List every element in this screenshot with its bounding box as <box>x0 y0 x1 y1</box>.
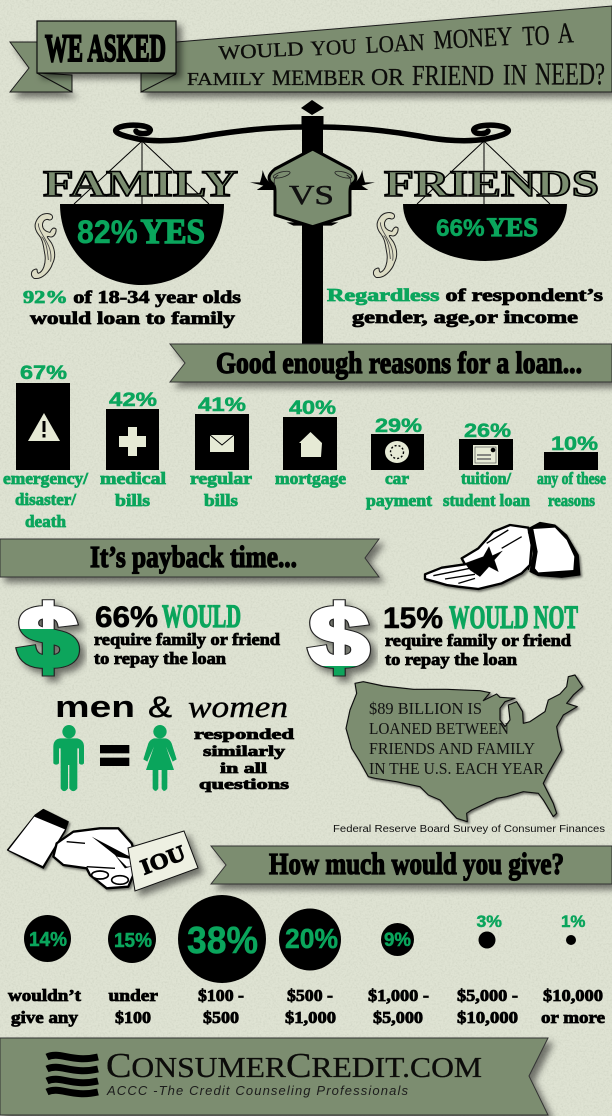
us map callout: IN THE U.S. EACH YEAR <box>369 759 545 778</box>
bubble: 14 percent <box>8 915 81 1027</box>
bar: any of these reasons: reasons <box>548 491 595 510</box>
bubble: 3 percent: 3% <box>476 912 502 931</box>
brand name: CONSUMER CREDIT.COM <box>106 1046 482 1085</box>
bar: any of these reasons <box>537 434 606 510</box>
question headline: A <box>557 17 574 50</box>
bar: emergency: emergency/ <box>3 469 88 488</box>
friends note <box>327 285 603 327</box>
icon: equals <box>100 745 129 766</box>
similar responses note: in all <box>220 761 267 777</box>
icon: certificate <box>473 445 498 465</box>
bubble: 9 percent: $1,000 - <box>368 986 429 1005</box>
us map callout: $89 BILLION IS <box>369 699 482 718</box>
bubble: 20 percent: $500 - <box>287 986 333 1005</box>
similar responses note: questions <box>199 777 289 793</box>
bar: mortgage <box>275 398 346 488</box>
bar: emergency: 67% <box>20 363 67 384</box>
bubble: 15 percent <box>108 915 159 1027</box>
icon: woman <box>143 725 177 791</box>
icon: dollar 15 percent filled: $ <box>309 589 369 686</box>
friends heading: FRIENDS <box>384 164 599 205</box>
bubble: 3 percent <box>457 912 518 1027</box>
bubble: 15 percent: under <box>108 986 159 1005</box>
bar: regular bills: 41% <box>198 395 246 416</box>
icon: dollar 66 percent filled: $ <box>18 589 78 686</box>
banner: payback time: It’s payback time... <box>90 539 297 574</box>
question headline: MONEY <box>433 21 513 55</box>
bubble: 14 percent: give any <box>11 1008 79 1027</box>
friends note: gender, age,or income <box>352 307 578 327</box>
question headline: FAMILY <box>187 69 265 89</box>
bubble: 9 percent: $5,000 <box>373 1008 423 1027</box>
would not repay block: require family or friend <box>385 631 571 650</box>
bubble: 1 percent: $10,000 <box>543 986 603 1005</box>
us map callout <box>346 675 583 822</box>
bubble: 15 percent: $100 <box>115 1008 151 1027</box>
would repay block <box>18 589 280 686</box>
bar: tuition <box>443 421 531 510</box>
question headline: OR <box>371 65 404 91</box>
would not repay block <box>309 589 578 686</box>
icon: house <box>299 432 322 457</box>
men and women comparison: & <box>148 691 172 724</box>
bar: car payment: 29% <box>375 416 422 437</box>
family heading: FAMILY <box>43 164 238 205</box>
bar: regular bills: bills <box>204 491 238 510</box>
bar: any of these reasons: 10% <box>551 434 598 455</box>
would repay block: WOULD <box>162 599 241 635</box>
bubble: 1 percent: or more <box>541 1008 606 1027</box>
bubble chart: amounts <box>8 895 606 1027</box>
similar responses note: similarly <box>203 744 286 760</box>
icon: wheel <box>385 441 409 463</box>
icon: warning triangle <box>28 413 60 441</box>
would repay block: 66% <box>95 601 158 634</box>
82% yes: 82%YES <box>77 212 205 251</box>
bar: tuition: 26% <box>464 421 511 442</box>
right pan: friends <box>403 204 567 261</box>
banner: payback time <box>0 539 379 577</box>
bar: mortgage: mortgage <box>275 469 346 488</box>
would repay block: to repay the loan <box>94 649 226 668</box>
bubble: 3 percent: $10,000 <box>457 1008 518 1027</box>
bar: medical bills <box>100 390 166 510</box>
question headline: LOAN <box>365 30 425 59</box>
family note: would loan to family <box>30 308 235 328</box>
left flourish <box>31 214 56 279</box>
similar responses note <box>194 727 295 793</box>
bubble: 38 percent: $500 <box>203 1008 239 1027</box>
question headline: YOU <box>310 34 357 60</box>
would not repay block: to repay the loan <box>385 650 517 669</box>
question headline: MEMBER <box>272 65 365 90</box>
friends note: Regardless of respondent’s <box>327 285 603 305</box>
men and women comparison: women <box>188 689 288 724</box>
would not repay block: 15% <box>383 602 443 635</box>
top ribbon: we asked: WE ASKED <box>45 27 166 70</box>
question headline: IN <box>503 58 527 92</box>
iou card <box>128 831 198 891</box>
similar responses note: responded <box>194 727 295 743</box>
bar: car payment: car <box>385 469 409 488</box>
bar: medical bills: bills <box>115 491 150 510</box>
bar: emergency <box>3 363 88 531</box>
bar: medical bills: 42% <box>109 390 157 411</box>
vs emblem: VS <box>289 180 334 210</box>
source note: Federal Reserve Board Survey of Consumer Finances <box>333 824 605 835</box>
family note: 92% of 18-34 year olds <box>23 287 241 307</box>
bar: emergency: disaster/ <box>15 490 76 509</box>
bubble: 3 percent: $5,000 - <box>457 986 518 1005</box>
bar chart: reasons <box>3 363 606 531</box>
bubble: 20 percent <box>279 908 341 1027</box>
bar: car payment: payment <box>366 491 432 510</box>
bubble: 15 percent: 15% <box>114 930 152 952</box>
right flourish <box>373 213 398 278</box>
top ribbon: we asked <box>10 6 612 92</box>
bubble: 14 percent: 14% <box>29 929 67 951</box>
icon: envelope <box>210 435 234 452</box>
us map callout: FRIENDS AND FAMILY <box>369 739 535 758</box>
footer ribbon <box>0 1038 548 1115</box>
bubble: 9 percent: 9% <box>384 930 411 951</box>
bubble: 1 percent <box>541 912 606 1027</box>
balance scale structure <box>74 100 550 346</box>
bar: tuition: tuition/ <box>461 469 511 488</box>
bubble: 38 percent: $100 - <box>198 986 244 1005</box>
iou card: IOU <box>137 840 189 880</box>
family note <box>23 287 241 328</box>
vs emblem <box>250 149 375 227</box>
bar: mortgage: 40% <box>289 398 336 419</box>
question headline: FRIEND <box>412 60 494 92</box>
bubble: 38 percent <box>178 895 266 1027</box>
question headline: TO <box>522 20 550 52</box>
men and women comparison <box>53 689 295 793</box>
bubble: 20 percent: 20% <box>285 923 338 954</box>
66% yes: 66%YES <box>436 213 538 242</box>
left pan: family <box>60 204 224 285</box>
bubble: 20 percent: $1,000 <box>285 1008 336 1027</box>
icon: medical cross <box>119 427 146 456</box>
tagline: ACCC -The Credit Counseling Professionals <box>106 1083 408 1098</box>
would repay block: require family or friend <box>94 630 280 649</box>
icon: dollar 66 percent filled: $ <box>18 589 78 686</box>
bar: regular bills: regular <box>190 469 253 488</box>
bar: emergency: death <box>25 512 67 531</box>
us map callout: LOANED BETWEEN <box>369 719 509 738</box>
bubble: 14 percent: wouldn’t <box>8 986 81 1005</box>
bubble: 9 percent <box>368 923 429 1027</box>
bar: regular bills <box>190 395 253 510</box>
bar: car payment <box>366 416 432 510</box>
bar: medical bills: medical <box>100 469 166 488</box>
icon: hand holding iou <box>7 809 198 891</box>
icon: man <box>53 725 84 791</box>
question headline <box>187 17 605 92</box>
bubble: 38 percent: 38% <box>187 920 258 962</box>
men and women comparison: men <box>55 689 135 724</box>
icon: open palm hand <box>425 522 580 589</box>
question headline: WOULD <box>218 38 304 64</box>
icon: consumercredit waves logo <box>47 1055 98 1094</box>
icon: dollar 15 percent filled: $ <box>309 589 369 686</box>
bar: tuition: student loan <box>443 491 531 510</box>
bubble: 1 percent: 1% <box>561 912 586 931</box>
